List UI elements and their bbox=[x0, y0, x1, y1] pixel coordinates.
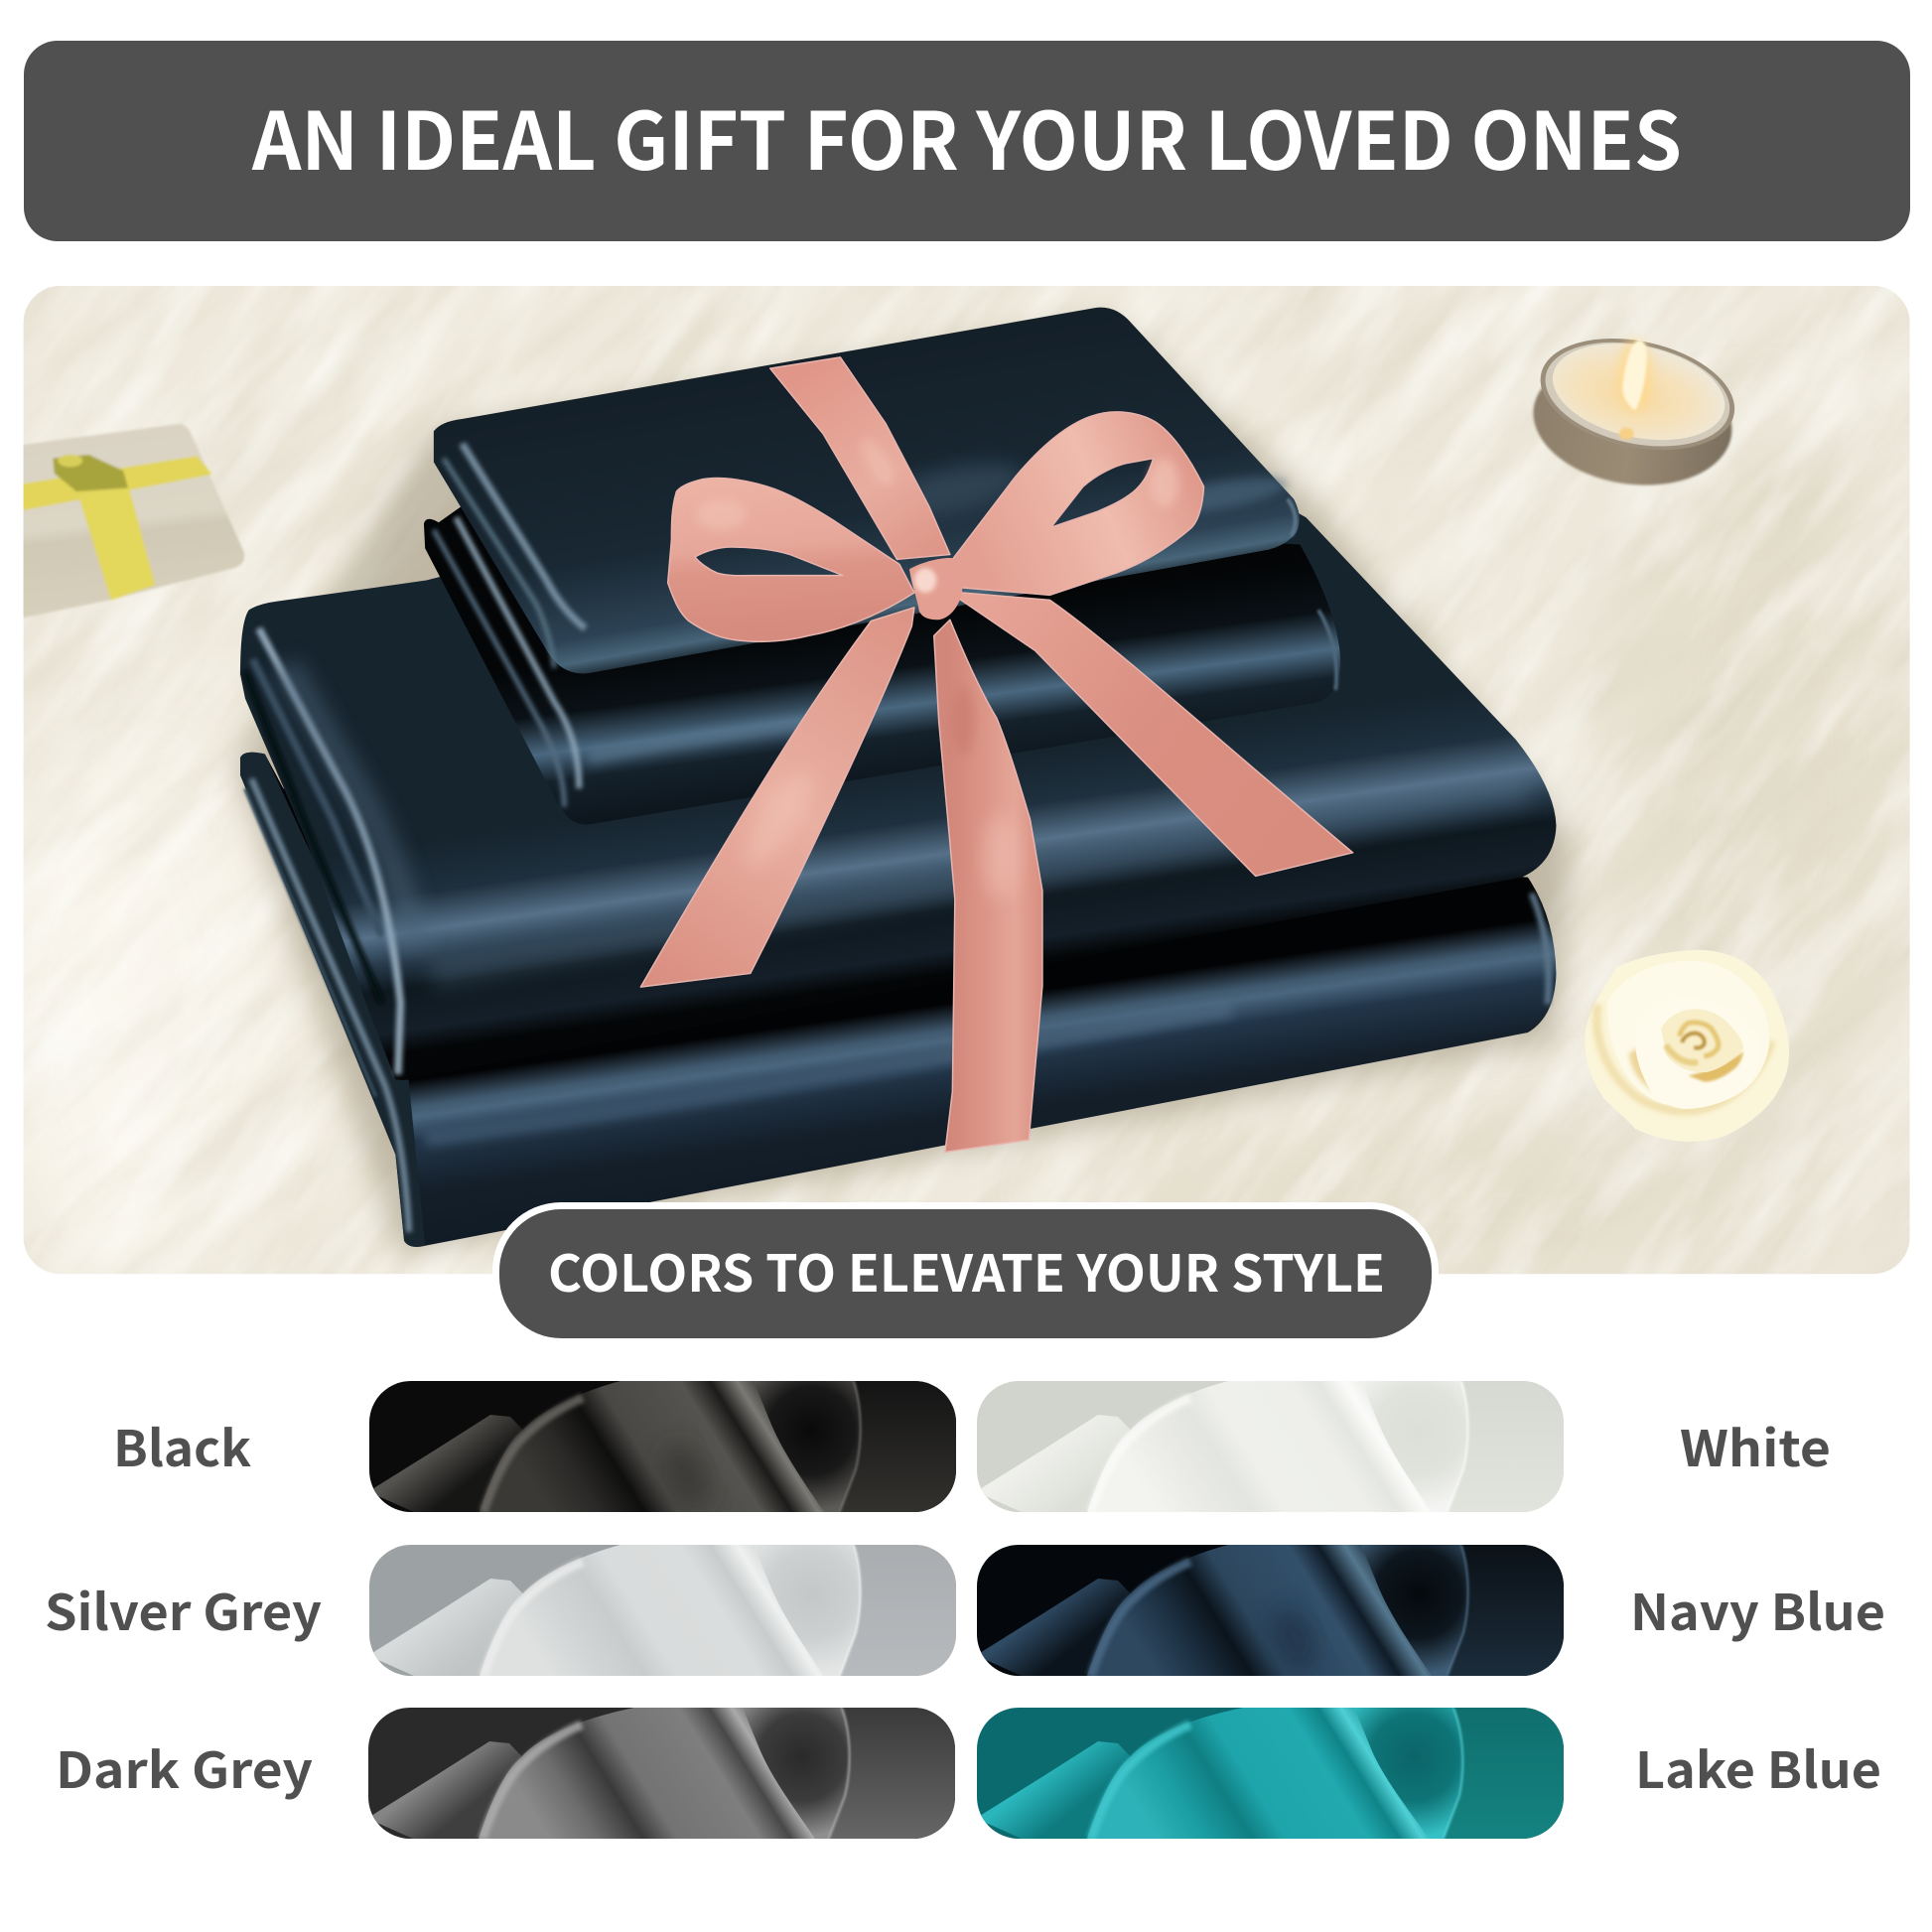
lower large folded sheet bbox=[240, 753, 1556, 1247]
color label: Lake Blue: Lake Blue bbox=[1635, 1731, 1881, 1803]
ribbon right loop bbox=[952, 412, 1204, 595]
icon: white rose bbox=[1585, 950, 1789, 1142]
pink satin ribbon bow bbox=[640, 357, 1353, 1152]
icon: candle bbox=[1531, 334, 1735, 486]
ribbon right tail bbox=[957, 593, 1353, 876]
swatch: White bbox=[977, 1381, 1564, 1512]
ribbon band over top bbox=[770, 357, 950, 559]
swatch: Black bbox=[369, 1381, 956, 1514]
swatch: Dark Grey bbox=[368, 1708, 955, 1839]
fur rug background bbox=[0, 286, 1922, 1294]
ribbon sheen highlights bbox=[696, 433, 1179, 898]
soft shadow under stack bbox=[234, 321, 1571, 1254]
panel: product photo bbox=[0, 286, 1922, 1294]
colors heading text: COLORS TO ELEVATE YOUR STYLE bbox=[548, 1233, 1385, 1307]
upper pillowcase bbox=[434, 308, 1300, 673]
ribbon centre strip bbox=[934, 620, 1042, 1152]
icon: wrapped gift box bbox=[12, 424, 244, 620]
color label: Dark Grey: Dark Grey bbox=[56, 1731, 313, 1803]
lower pillowcase bbox=[424, 492, 1340, 824]
ribbon left tail bbox=[640, 608, 914, 987]
color label: Navy Blue: Navy Blue bbox=[1630, 1574, 1885, 1645]
swatch: Navy Blue bbox=[977, 1545, 1564, 1678]
color label: Silver Grey: Silver Grey bbox=[45, 1574, 322, 1645]
title banner bbox=[24, 41, 1910, 241]
upper large folded sheet bbox=[239, 513, 1557, 1080]
colors heading pill bbox=[492, 1202, 1439, 1345]
swatch: Silver Grey bbox=[369, 1545, 956, 1676]
swatch: Lake Blue bbox=[977, 1708, 1564, 1839]
color label: Black: Black bbox=[113, 1410, 251, 1481]
ribbon left loop bbox=[668, 479, 914, 641]
title text: AN IDEAL GIFT FOR YOUR LOVED ONES bbox=[251, 78, 1682, 194]
color label: White: White bbox=[1680, 1410, 1831, 1481]
candle flame bbox=[1622, 341, 1647, 410]
ribbon knot bbox=[909, 558, 962, 620]
